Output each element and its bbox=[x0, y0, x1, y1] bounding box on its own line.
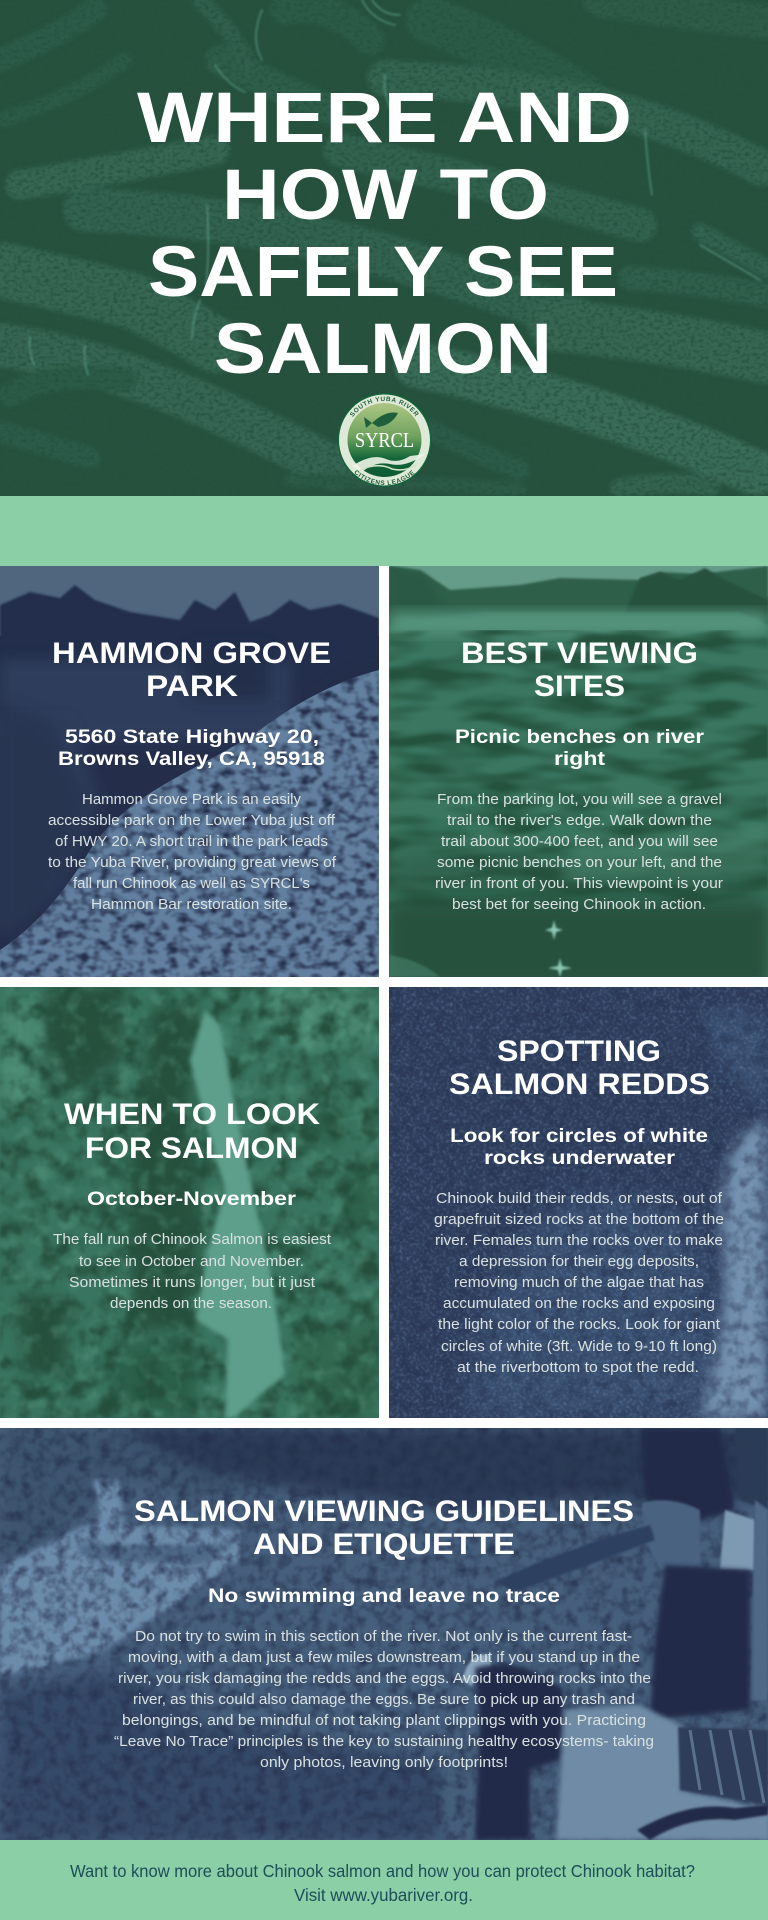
heading bbox=[449, 1035, 710, 1101]
river bbox=[0, 1480, 240, 1677]
striped blanket bbox=[678, 1727, 768, 1805]
panel: Salmon Viewing Guidelines and Etiquette bbox=[0, 1428, 768, 1840]
heading: SALMON VIEWING GUIDELINES bbox=[134, 1495, 634, 1528]
footer call to action bbox=[0, 1840, 768, 1920]
body text: some picnic benches on your left, and the bbox=[437, 854, 722, 871]
subheading: October-November bbox=[87, 1188, 296, 1210]
photo: river bank with rocks bbox=[0, 566, 379, 980]
body text: From the parking lot, you will see a gravel bbox=[437, 791, 722, 808]
body text: trail to the river's edge. Walk down the bbox=[447, 812, 712, 829]
logo lettering bbox=[350, 396, 418, 485]
logo lettering: SOUTH YUBA RIVER bbox=[350, 396, 418, 416]
body text: to see in October and November. bbox=[79, 1253, 304, 1270]
child: pointing arm bbox=[495, 1525, 655, 1592]
body text: only photos, leaving only footprints! bbox=[260, 1754, 508, 1771]
title: SALMON bbox=[214, 310, 552, 389]
heading: SALMON REDDS bbox=[449, 1068, 710, 1101]
body text bbox=[48, 791, 337, 913]
logo: SYRCL seal: SYRCL bbox=[355, 428, 414, 452]
pale salmon body bbox=[190, 1010, 285, 1418]
grass foreground bbox=[0, 1670, 440, 1840]
subheading: No swimming and leave no trace bbox=[208, 1585, 560, 1607]
body text bbox=[434, 1190, 724, 1376]
fish highlights bbox=[30, 0, 760, 375]
subheading: Picnic benches on river bbox=[455, 726, 704, 748]
child: face bbox=[642, 1500, 700, 1570]
subheading bbox=[450, 1125, 708, 1169]
body text: Sometimes it runs longer, but it just bbox=[69, 1274, 316, 1291]
body text: a depression for their egg deposits, bbox=[459, 1253, 699, 1270]
dress bbox=[556, 1705, 768, 1840]
heading: FOR SALMON bbox=[85, 1132, 298, 1165]
subheading: address: Browns Valley, CA, 95918 bbox=[58, 748, 325, 770]
logo: SYRCL seal bbox=[338, 393, 432, 487]
photo: river and hills bbox=[389, 566, 768, 985]
title: WHERE AND bbox=[137, 79, 632, 158]
body text: accessible park on the Lower Yuba just off bbox=[48, 812, 336, 829]
second child: hat and hair bbox=[462, 1654, 492, 1686]
child: dark shirt bbox=[650, 1565, 750, 1720]
body text: Do not try to swim in this section of the river. Not only is the current fast- bbox=[135, 1628, 632, 1645]
subheading bbox=[455, 726, 704, 770]
panel: Best Viewing Sites bbox=[389, 566, 768, 985]
body text bbox=[435, 791, 723, 913]
body text: at the riverbottom to spot the redd. bbox=[457, 1359, 699, 1376]
subheading: address: 5560 State Highway 20, bbox=[65, 726, 319, 748]
title bbox=[137, 79, 632, 389]
body text: river. Females turn the rocks over to make bbox=[435, 1232, 723, 1249]
body text: river, as this could also damage the eggs. Be sure to pick up any trash and bbox=[133, 1691, 635, 1708]
subheading: rocks underwater bbox=[484, 1147, 675, 1169]
heading: BEST VIEWING bbox=[461, 637, 698, 670]
footer call to action: Want to know more about Chinook salmon and how you can protect Chinook habitat? bbox=[70, 1861, 695, 1881]
hero panel bbox=[0, 0, 768, 496]
logo fish bbox=[364, 412, 398, 428]
body text bbox=[114, 1628, 654, 1771]
body text: The fall run of Chinook Salmon is easiest bbox=[53, 1231, 332, 1248]
body text: circles of white (3ft. Wide to 9-10 ft long) bbox=[441, 1338, 717, 1355]
body text: grapefruit sized rocks at the bottom of the bbox=[434, 1211, 724, 1228]
child: hair and backdrop bbox=[640, 1428, 735, 1520]
body text: of HWY 20. A short trail in the park leads bbox=[55, 833, 328, 850]
logo river waves bbox=[352, 454, 426, 472]
photo: child pointing at the river bbox=[0, 1428, 768, 1840]
heading: HAMMON GROVE bbox=[52, 637, 331, 670]
body text: the light color of the rocks. Look for giant bbox=[438, 1316, 721, 1333]
treeline bbox=[0, 584, 379, 636]
heading bbox=[461, 637, 698, 703]
panel: Hammon Grove Park bbox=[0, 566, 379, 980]
child: shoulder and backpack bbox=[720, 1510, 755, 1570]
heading bbox=[52, 637, 331, 703]
body text: best bet for seeing Chinook in action. bbox=[452, 896, 706, 913]
heading bbox=[64, 1098, 321, 1165]
body text: trail about 300-400 feet, and you will see bbox=[441, 833, 718, 850]
hero photo: salmon in duotone green bbox=[0, 0, 768, 496]
body text: Chinook build their redds, or nests, out of bbox=[436, 1190, 723, 1207]
footer call to action: Visit www.yubariver.org. bbox=[294, 1885, 473, 1905]
heading: PARK bbox=[146, 670, 239, 703]
heading: AND ETIQUETTE bbox=[253, 1528, 515, 1561]
heading: SPOTTING bbox=[497, 1035, 661, 1068]
body text: removing much of the algae that has bbox=[454, 1274, 704, 1291]
body text: river, you risk damaging the redds and the eggs. Avoid throwing rocks into the bbox=[118, 1670, 651, 1687]
body text: belongings, and be mindful of not taking plant clippings with you. Practicing bbox=[122, 1712, 646, 1729]
sun glints bbox=[545, 920, 572, 977]
subheading: right bbox=[554, 748, 606, 770]
body text: Hammon Grove Park is an easily bbox=[82, 791, 301, 808]
panel: When to Look for Salmon bbox=[0, 987, 379, 1418]
title: SAFELY SEE bbox=[148, 233, 618, 312]
photo: salmon in shallow water bbox=[0, 987, 379, 1418]
forest bbox=[4, 1432, 243, 1553]
subheading: address bbox=[58, 726, 325, 770]
panel: Spotting Salmon Redds bbox=[389, 987, 768, 1418]
logo lettering: CITIZENS LEAGUE bbox=[354, 470, 414, 485]
heading bbox=[134, 1495, 634, 1561]
photo: gravel riverbed bbox=[389, 987, 768, 1418]
mint band bbox=[0, 496, 768, 566]
body text: moving, with a dam just a few miles downstream, but if you stand up in the bbox=[128, 1649, 640, 1666]
heading: SITES bbox=[534, 670, 625, 703]
body text: river in front of you. This viewpoint is your bbox=[435, 875, 723, 892]
title: HOW TO bbox=[222, 156, 549, 235]
body text: “Leave No Trace” principles is the key to sustaining healthy ecosystems- taking bbox=[114, 1733, 654, 1750]
heading: WHEN TO LOOK bbox=[64, 1098, 321, 1131]
subheading: Look for circles of white bbox=[450, 1125, 708, 1147]
body text: fall run Chinook as well as SYRCL's bbox=[73, 875, 310, 892]
body text bbox=[53, 1231, 332, 1312]
body text: Hammon Bar restoration site. bbox=[91, 896, 292, 913]
body text: to the Yuba River, providing great views of bbox=[48, 854, 337, 871]
body text: depends on the season. bbox=[110, 1295, 272, 1312]
body text: accumulated on the rocks and exposing bbox=[443, 1295, 715, 1312]
